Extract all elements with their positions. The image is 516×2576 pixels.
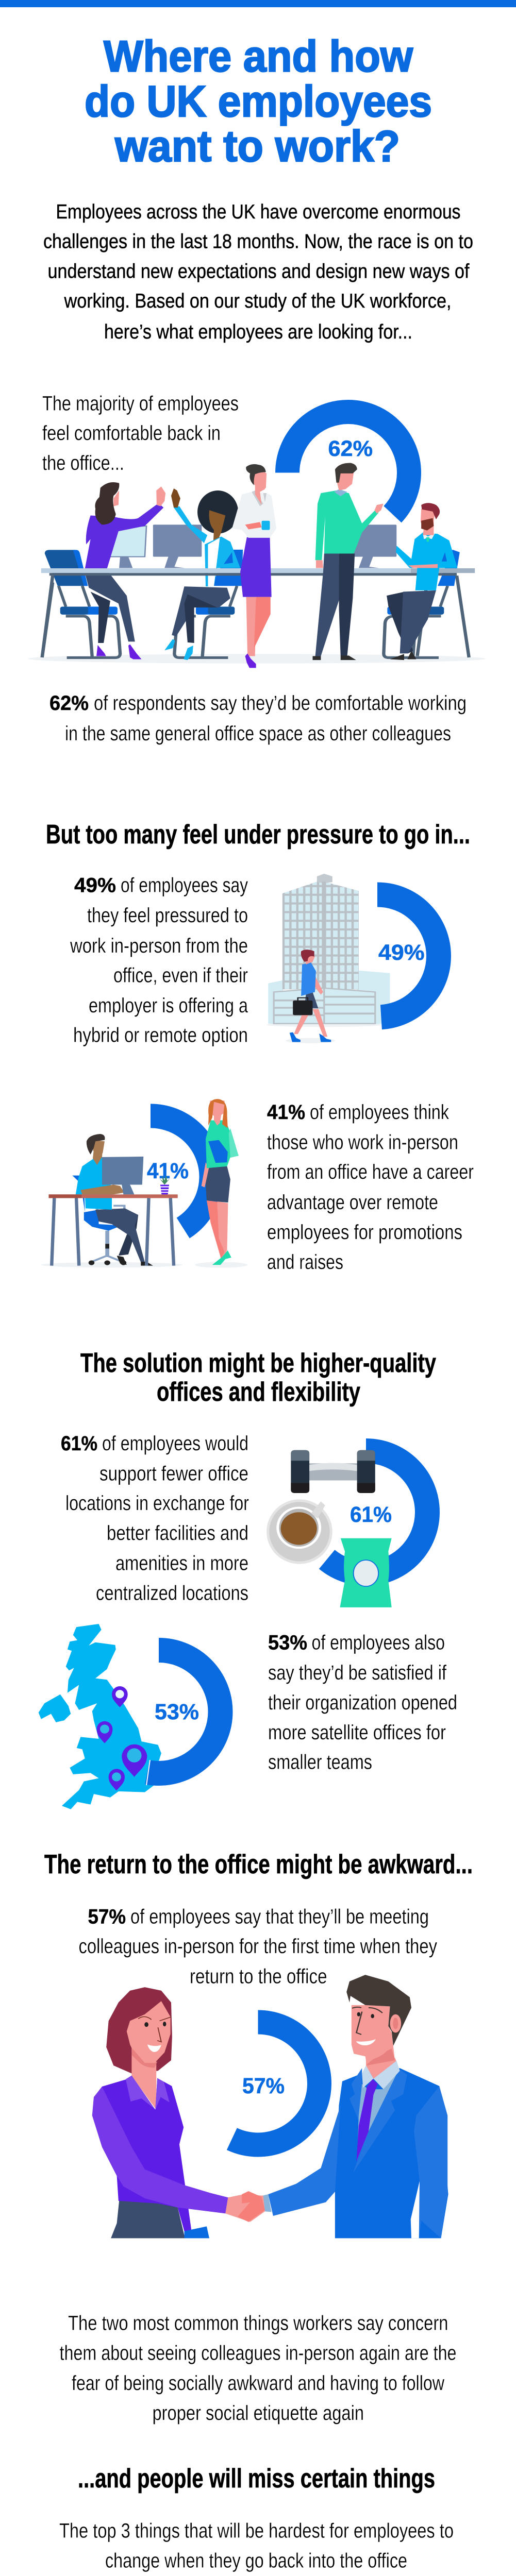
text: 53% satellite offices xyxy=(268,1631,457,1773)
text: majority comfortable xyxy=(42,393,239,474)
intro text: working. Based on our study of the UK workforce, xyxy=(64,290,451,312)
text: 61% fewer offices: centralized locations xyxy=(96,1582,248,1604)
text: 61% fewer offices: of employees would xyxy=(102,1432,248,1455)
text: 41% career advantage: advantage over remote xyxy=(267,1191,438,1214)
text: 53% satellite offices: say they’d be satisfied if xyxy=(268,1662,447,1684)
woman xyxy=(92,1987,228,2238)
donut chart: 41%: 41% xyxy=(147,1159,189,1183)
text: 41% career advantage: of employees think xyxy=(310,1101,450,1124)
text: top 3 things: change when they go back into the office xyxy=(105,2549,407,2572)
desk xyxy=(41,568,475,657)
text: 49% pressured: they feel pressured to xyxy=(87,904,248,927)
text: 53% satellite offices: of employees also xyxy=(311,1631,445,1654)
text: majority comfortable: feel comfortable back in xyxy=(42,422,221,445)
illustration: dumbbell, coffee and snack xyxy=(267,1450,392,1607)
text: 41% career advantage: 41% xyxy=(267,1101,305,1124)
text: 41% career advantage: from an office have a career xyxy=(267,1161,474,1183)
title xyxy=(85,32,432,171)
standing woman with mug xyxy=(232,464,276,668)
text: 41% career advantage xyxy=(267,1101,474,1274)
donut chart: 53% xyxy=(97,1650,221,1785)
text: common concerns: proper social etiquette again xyxy=(153,2402,364,2425)
donut chart: 49% xyxy=(316,894,439,1017)
heading: the solution xyxy=(80,1348,436,1407)
title: do UK employees xyxy=(85,77,432,126)
donut chart: 57%: 57% xyxy=(242,2074,285,2098)
chair right xyxy=(384,550,460,658)
donut chart: 49%: 49% xyxy=(378,940,425,965)
monitors xyxy=(109,524,396,568)
desk with plant xyxy=(48,1176,178,1266)
text: 49% pressured xyxy=(70,874,248,1047)
donut chart: 62%: 62% xyxy=(328,436,373,461)
text: 62% comfortable xyxy=(49,692,467,745)
donut chart: 41% xyxy=(90,1116,211,1238)
text: common concerns xyxy=(60,2312,457,2425)
standing woman xyxy=(202,1099,239,1265)
donut chart: 53%: 53% xyxy=(155,1700,199,1724)
donut chart: 62% xyxy=(288,412,409,534)
standing man in green xyxy=(312,463,384,660)
icon: snack bag xyxy=(340,1538,392,1607)
text: 61% fewer offices: locations in exchange for xyxy=(65,1492,249,1515)
text: 61% fewer offices: better facilities and xyxy=(107,1522,248,1545)
text: 57% meeting colleagues: return to the office xyxy=(190,1965,327,1988)
text: 53% satellite offices: smaller teams xyxy=(268,1751,372,1773)
donut chart: 61%: 61% xyxy=(350,1502,392,1527)
businesswoman xyxy=(290,950,331,1042)
text: top 3 things xyxy=(59,2519,454,2572)
heading: the solution: offices and flexibility xyxy=(157,1377,360,1407)
text: 41% career advantage: and raises xyxy=(267,1251,343,1274)
intro text: understand new expectations and design new ways of xyxy=(47,261,470,282)
text: 61% fewer offices: 61% xyxy=(61,1432,97,1455)
text: 49% pressured: hybrid or remote option xyxy=(73,1024,248,1047)
location pins xyxy=(97,1686,147,1791)
icon: dumbbell xyxy=(291,1450,375,1493)
top colour bar xyxy=(0,0,516,7)
text: 53% satellite offices: their organization opened xyxy=(268,1691,457,1714)
text: 49% pressured: 49% xyxy=(74,874,116,896)
text: 49% pressured: employer is offering a xyxy=(89,994,248,1017)
text: 57% meeting colleagues: of employees say that they’ll be meeting xyxy=(130,1905,429,1928)
icon: coffee cup xyxy=(267,1499,332,1564)
text: 61% fewer offices: amenities in more xyxy=(115,1552,248,1574)
illustration: office tower and commuter xyxy=(267,874,390,1043)
text: 41% career advantage: those who work in-person xyxy=(267,1131,458,1154)
illustration: office team at shared desk xyxy=(28,463,486,668)
illustration: handshake xyxy=(92,1975,448,2238)
text: 62% comfortable: 62% xyxy=(49,692,89,715)
intro text xyxy=(43,201,473,343)
text: 57% meeting colleagues: 57% xyxy=(88,1905,126,1928)
chair left xyxy=(42,550,120,658)
man at desk xyxy=(72,1134,153,1266)
text: 49% pressured: office, even if their xyxy=(113,964,248,987)
illustration: man at desk and woman with folder xyxy=(41,1099,247,1268)
title: Where and how xyxy=(104,32,413,81)
title: want to work? xyxy=(114,122,400,171)
woman high-fiving xyxy=(84,482,165,659)
intro text: here’s what employees are looking for... xyxy=(104,321,412,343)
text: 57% meeting colleagues xyxy=(78,1905,437,1988)
text: 41% career advantage: employees for promotions xyxy=(267,1221,462,1244)
seated man with beard xyxy=(387,503,457,660)
illustration: map of UK with pins xyxy=(39,1624,161,1809)
intro text: Employees across the UK have overcome enormous xyxy=(56,201,461,223)
text: majority comfortable: the office... xyxy=(42,452,124,474)
donut chart: 61% xyxy=(305,1451,427,1573)
woman with afro seated xyxy=(164,488,240,660)
text: 53% satellite offices: 53% xyxy=(268,1631,307,1654)
text: majority comfortable: The majority of employees xyxy=(42,393,239,415)
text: 61% fewer offices xyxy=(61,1432,249,1604)
donut chart: 57% xyxy=(197,2022,320,2145)
text: 53% satellite offices: more satellite offices for xyxy=(268,1721,446,1744)
clasped hands xyxy=(225,2191,265,2222)
text: 49% pressured: of employees say xyxy=(121,874,248,896)
text: 61% fewer offices: support fewer office xyxy=(99,1462,248,1485)
tower xyxy=(274,874,375,1024)
text: 57% meeting colleagues: colleagues in-person for the first time when they xyxy=(78,1935,437,1958)
man xyxy=(262,1975,448,2238)
text: 49% pressured: work in-person from the xyxy=(70,935,248,957)
chair middle xyxy=(174,550,243,658)
